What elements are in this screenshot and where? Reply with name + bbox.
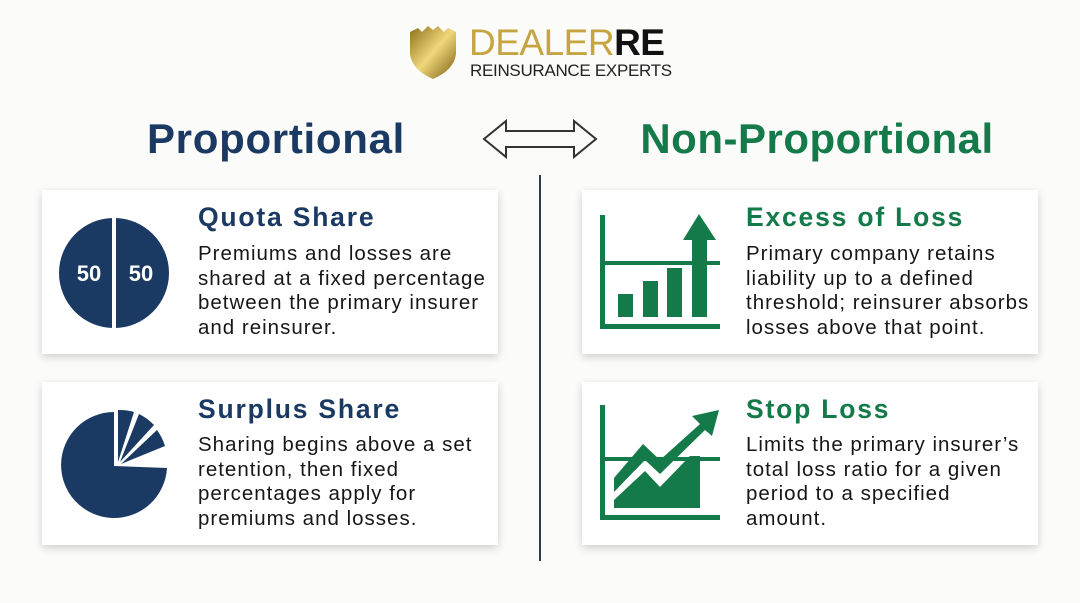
icon: shield bbox=[410, 26, 456, 79]
title: Non-Proportional: Non-Proportional bbox=[640, 115, 994, 162]
body text: Primary company retains bbox=[746, 242, 996, 265]
heading: Stop Loss bbox=[746, 394, 890, 424]
icon: 50/50 pie: 50 bbox=[77, 261, 101, 286]
body text: threshold; reinsurer absorbs bbox=[746, 291, 1029, 314]
heading: Surplus Share bbox=[198, 394, 401, 424]
body text: premiums and losses. bbox=[198, 506, 417, 530]
body text bbox=[198, 242, 486, 338]
body text: amount. bbox=[746, 506, 827, 530]
heading: Excess of Loss bbox=[746, 202, 964, 232]
body text: total loss ratio for a given bbox=[746, 458, 1002, 480]
body text: period to a specified bbox=[746, 482, 950, 505]
body text bbox=[746, 433, 1019, 530]
icon: 50/50 pie: 50 bbox=[129, 261, 153, 286]
body text: between the primary insurer bbox=[198, 291, 479, 314]
panel: surplus share bbox=[42, 382, 498, 545]
body text bbox=[746, 242, 1029, 338]
brand name: DEALERRE bbox=[469, 22, 664, 63]
panel: excess of loss bbox=[582, 190, 1038, 354]
panel: stop loss bbox=[582, 382, 1038, 545]
icon: double arrow bbox=[482, 119, 598, 159]
body text bbox=[198, 433, 472, 530]
body text: Premiums and losses are bbox=[198, 242, 452, 265]
body text: shared at a fixed percentage bbox=[198, 266, 486, 290]
logo: REINSURANCE EXPERTS bbox=[470, 61, 672, 80]
body text: Sharing begins above a set bbox=[198, 433, 472, 456]
logo bbox=[410, 22, 672, 80]
icon: trend chart bbox=[600, 405, 720, 520]
body text: and reinsurer. bbox=[198, 316, 337, 338]
heading: Quota Share bbox=[198, 202, 375, 232]
body text: Limits the primary insurer’s bbox=[746, 433, 1019, 456]
body text: losses above that point. bbox=[746, 316, 985, 338]
icon: bar chart with arrow bbox=[600, 214, 720, 329]
title: Proportional: Proportional bbox=[147, 115, 405, 162]
icon: sliced pie bbox=[61, 410, 167, 518]
body text: liability up to a defined bbox=[746, 266, 974, 290]
body text: percentages apply for bbox=[198, 482, 416, 505]
body text: retention, then fixed bbox=[198, 458, 399, 480]
panel: quota share bbox=[42, 190, 498, 354]
icon: 50/50 pie bbox=[59, 218, 169, 328]
